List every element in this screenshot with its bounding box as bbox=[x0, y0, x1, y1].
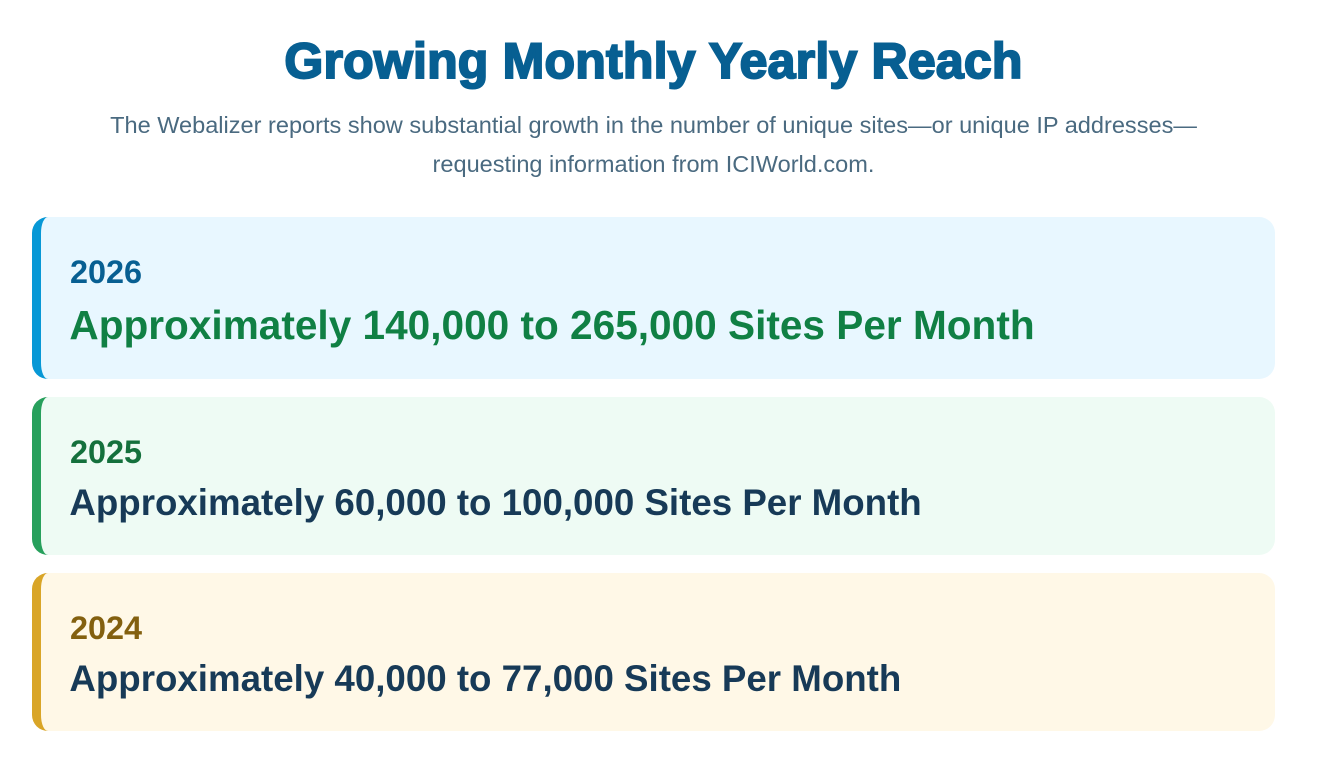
subtitle: The Webalizer reports show substantial growth in the number of unique sites—or unique IP addresses— bbox=[110, 112, 1197, 138]
year: 2024: 2024 bbox=[70, 610, 142, 646]
panel: 2025 bbox=[32, 397, 1275, 555]
value: 2025 reach: Approximately 60,000 to 100,000 Sites Per Month bbox=[69, 482, 922, 523]
title: Growing Monthly Yearly Reach bbox=[284, 33, 1023, 89]
year: 2025: 2025 bbox=[70, 434, 142, 470]
value: 2024 reach: Approximately 40,000 to 77,000 Sites Per Month bbox=[69, 658, 901, 699]
subtitle bbox=[110, 112, 1197, 177]
value: 2026 reach: Approximately 140,000 to 265,000 Sites Per Month bbox=[69, 302, 1035, 348]
subtitle: requesting information from ICIWorld.com. bbox=[433, 151, 874, 177]
panel: 2024 bbox=[32, 573, 1275, 731]
year: 2026: 2026 bbox=[70, 254, 142, 290]
panel: 2026 bbox=[32, 217, 1275, 379]
